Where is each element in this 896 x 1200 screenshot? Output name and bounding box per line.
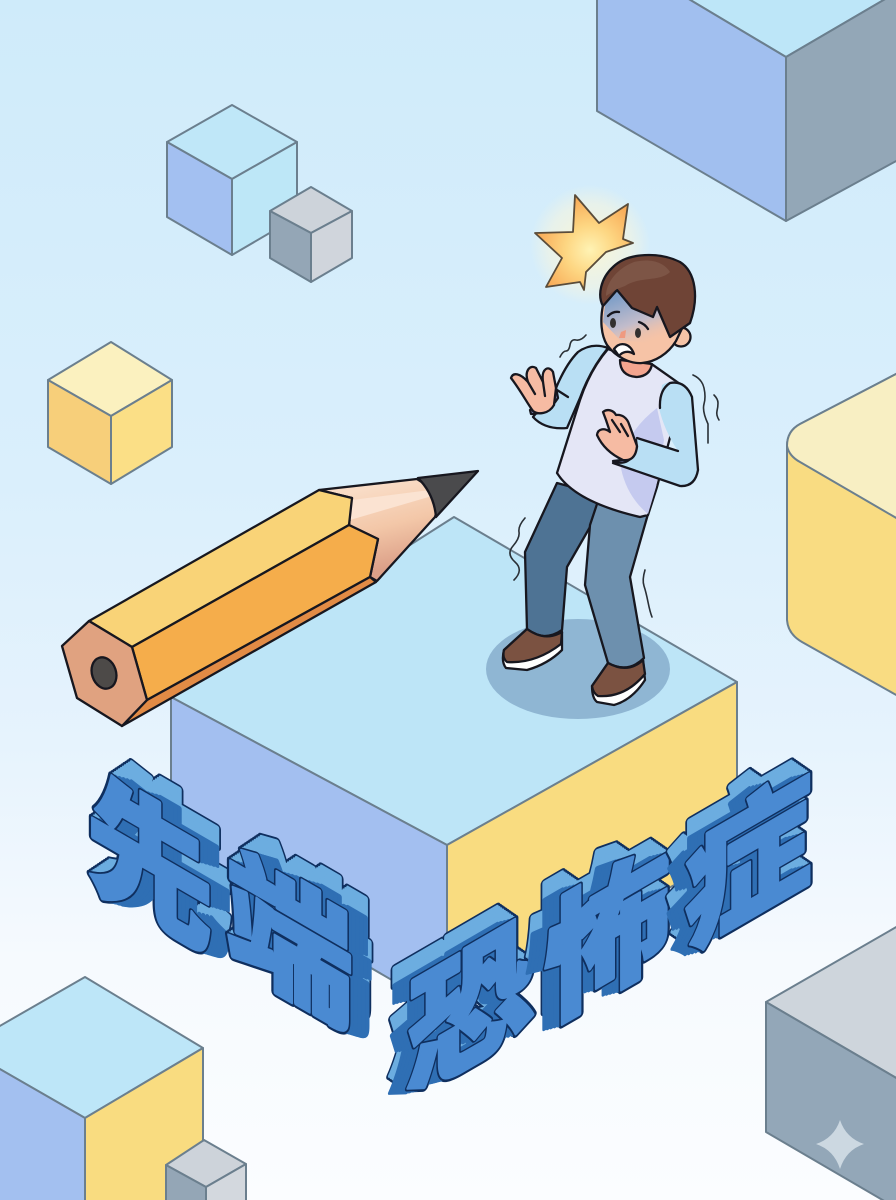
title character 症: 症 xyxy=(684,751,812,978)
title character 症: 症 xyxy=(680,749,808,975)
title character 先: 先 xyxy=(92,749,220,975)
shirt shade xyxy=(620,408,664,514)
cube: grey bottom right xyxy=(766,926,896,1200)
title character 先: 先 xyxy=(86,753,214,980)
title character 先: 先 xyxy=(94,748,222,974)
cube: small grey xyxy=(270,187,352,282)
title character 怖: 怖 xyxy=(537,827,665,1053)
title character 怖: 怖 xyxy=(540,826,668,1052)
title character 症: 症 xyxy=(670,755,798,981)
title character 怖: 怖 xyxy=(535,819,663,1045)
title character 怖: 怖 xyxy=(533,818,661,1044)
tremble lines xyxy=(510,335,719,617)
title character 症: 症 xyxy=(679,748,807,974)
title character 症: 症 xyxy=(675,745,803,971)
title character 先: 先 xyxy=(90,751,218,977)
eyebrows xyxy=(608,312,648,329)
cube: bottom left xyxy=(0,977,203,1200)
face pallor xyxy=(603,285,680,345)
pencil core xyxy=(88,654,120,692)
title character 端: 端 xyxy=(230,827,358,1053)
title character 怖: 怖 xyxy=(535,819,663,1045)
title character 症: 症 xyxy=(670,741,798,968)
title character 端: 端 xyxy=(234,832,362,1058)
pencil top face xyxy=(89,490,352,647)
title character 先: 先 xyxy=(88,752,216,978)
title character 症: 症 xyxy=(684,751,812,978)
title character 怖: 怖 xyxy=(540,823,668,1049)
title character 症: 症 xyxy=(668,740,796,966)
title character 恐: 恐 xyxy=(395,900,523,1126)
title character 恐: 恐 xyxy=(392,887,520,1114)
pencil wood cone xyxy=(319,479,442,581)
left cuff xyxy=(530,388,558,414)
title character 怖: 怖 xyxy=(544,825,672,1052)
title character 恐: 恐 xyxy=(402,895,530,1121)
title character 恐: 恐 xyxy=(395,890,523,1116)
title character 恐: 恐 xyxy=(399,899,527,1125)
hair xyxy=(600,255,695,337)
left sleeve xyxy=(533,346,608,428)
title character 先: 先 xyxy=(90,751,218,977)
pencil side face xyxy=(132,525,378,700)
cube: large top right xyxy=(597,0,896,221)
title character 先: 先 xyxy=(102,743,230,969)
title character 端: 端 xyxy=(238,833,366,1059)
cube: blue floating xyxy=(167,105,297,255)
title character 症: 症 xyxy=(666,739,794,965)
icon: impact star xyxy=(530,185,650,305)
title character 怖: 怖 xyxy=(533,818,661,1044)
nose xyxy=(619,330,626,338)
pencil lead tip xyxy=(418,471,478,517)
title character 恐: 恐 xyxy=(392,887,520,1114)
title: 先端恐怖症 xyxy=(86,728,812,1134)
title character 端: 端 xyxy=(226,829,354,1056)
title character 恐: 恐 xyxy=(392,901,520,1127)
title character 症: 症 xyxy=(677,746,805,973)
pencil end xyxy=(62,621,147,726)
title character 端: 端 xyxy=(230,827,358,1053)
cube: small grey bottom left xyxy=(166,1140,246,1200)
title character 端: 端 xyxy=(242,834,370,1060)
title character 症: 症 xyxy=(682,750,810,976)
title character 怖: 怖 xyxy=(530,815,658,1042)
title character 症: 症 xyxy=(668,740,796,966)
title character 端: 端 xyxy=(244,817,372,1043)
title character 先: 先 xyxy=(88,752,216,978)
title character 怖: 怖 xyxy=(540,823,668,1049)
title character 端: 端 xyxy=(242,819,370,1045)
title character 先: 先 xyxy=(96,747,224,973)
title character 恐: 恐 xyxy=(397,891,525,1117)
title character 怖: 怖 xyxy=(530,829,658,1055)
pencil wood highlight xyxy=(350,490,432,520)
title character 先: 先 xyxy=(98,757,226,983)
title character 怖: 怖 xyxy=(533,828,661,1054)
neck xyxy=(620,360,652,377)
title character 端: 端 xyxy=(232,825,360,1051)
title character 端: 端 xyxy=(228,828,356,1054)
title character 症: 症 xyxy=(673,744,801,970)
title character 先: 先 xyxy=(102,743,230,969)
title character 怖: 怖 xyxy=(539,822,667,1048)
title character 恐: 恐 xyxy=(388,885,516,1111)
title character 怖: 怖 xyxy=(528,814,656,1040)
title character 怖: 怖 xyxy=(526,813,654,1039)
title character 症: 症 xyxy=(677,746,805,973)
title character 恐: 恐 xyxy=(404,896,532,1122)
title character 端: 端 xyxy=(240,820,368,1046)
title character 先: 先 xyxy=(94,756,222,982)
title character 端: 端 xyxy=(242,819,370,1045)
title character 端: 端 xyxy=(234,824,362,1050)
title character 症: 症 xyxy=(673,754,801,980)
title character 症: 症 xyxy=(670,741,798,968)
right shoe xyxy=(592,660,645,705)
title character 先: 先 xyxy=(100,744,228,970)
title character 端: 端 xyxy=(236,823,364,1049)
title character 症: 症 xyxy=(666,756,794,982)
right hand xyxy=(597,410,637,460)
title character 端: 端 xyxy=(226,829,354,1056)
mouth xyxy=(614,344,634,356)
cube: rounded yellow right xyxy=(787,373,896,696)
right cuff xyxy=(613,440,637,463)
title character 端: 端 xyxy=(228,828,356,1054)
title character 恐: 恐 xyxy=(393,889,521,1115)
title character 恐: 恐 xyxy=(395,890,523,1116)
title character 端: 端 xyxy=(238,821,366,1047)
title character 恐: 恐 xyxy=(388,885,516,1111)
pencil xyxy=(62,471,478,726)
title character 症: 症 xyxy=(666,739,794,965)
title character 端: 端 xyxy=(246,816,374,1042)
title character 恐: 恐 xyxy=(388,902,516,1128)
title character 端: 端 xyxy=(232,825,360,1051)
title character 先: 先 xyxy=(92,749,220,975)
title character 端: 端 xyxy=(234,824,362,1050)
title character 恐: 恐 xyxy=(390,886,518,1112)
title character 怖: 怖 xyxy=(544,825,672,1052)
front leg xyxy=(585,495,648,667)
title character 先: 先 xyxy=(96,747,224,973)
title character 恐: 恐 xyxy=(406,897,534,1124)
back leg xyxy=(525,483,620,636)
title character 先: 先 xyxy=(90,754,218,981)
eyes xyxy=(610,318,641,338)
icon: sparkle watermark xyxy=(816,1120,864,1169)
title character 先: 先 xyxy=(102,758,230,984)
title character 先: 先 xyxy=(98,745,226,971)
title character 恐: 恐 xyxy=(404,896,532,1122)
title character 怖: 怖 xyxy=(537,820,665,1047)
title character 症: 症 xyxy=(671,743,799,969)
sleeve fold xyxy=(557,390,568,397)
title character 恐: 恐 xyxy=(399,892,527,1119)
title character 恐: 恐 xyxy=(390,886,518,1112)
title character 恐: 恐 xyxy=(401,894,529,1120)
title character 端: 端 xyxy=(238,821,366,1047)
title character 恐: 恐 xyxy=(401,894,529,1120)
title character 恐: 恐 xyxy=(402,895,530,1121)
title character 怖: 怖 xyxy=(526,813,654,1039)
title character 恐: 恐 xyxy=(402,898,530,1124)
pencil lower face xyxy=(122,577,376,726)
title character 怖: 怖 xyxy=(531,817,659,1043)
title character 怖: 怖 xyxy=(539,822,667,1048)
left hand xyxy=(511,367,556,413)
person xyxy=(503,255,719,705)
title character 端: 端 xyxy=(226,829,354,1056)
title character 怖: 怖 xyxy=(528,814,656,1040)
title character 端: 端 xyxy=(244,817,372,1043)
ear xyxy=(672,328,690,346)
title character 先: 先 xyxy=(94,748,222,974)
title character 症: 症 xyxy=(673,744,801,970)
title character 恐: 恐 xyxy=(406,897,534,1124)
title character 先: 先 xyxy=(98,745,226,971)
title character 恐: 恐 xyxy=(399,892,527,1119)
title character 症: 症 xyxy=(677,753,805,979)
title character 怖: 怖 xyxy=(544,825,672,1052)
title character 症: 症 xyxy=(684,751,812,978)
title character 先: 先 xyxy=(104,741,232,967)
person's shadow xyxy=(486,619,670,719)
right sleeve xyxy=(613,381,698,486)
shirt xyxy=(557,349,680,517)
title character 恐: 恐 xyxy=(406,897,534,1124)
title character 症: 症 xyxy=(680,749,808,975)
title character 端: 端 xyxy=(236,823,364,1049)
cube: yellow left xyxy=(48,342,172,484)
title character 端: 端 xyxy=(246,816,374,1042)
title character 恐: 恐 xyxy=(393,889,521,1115)
title character 恐: 恐 xyxy=(397,891,525,1117)
title character 怖: 怖 xyxy=(531,817,659,1043)
title character 端: 端 xyxy=(246,835,374,1061)
title character 怖: 怖 xyxy=(542,824,670,1050)
title character 先: 先 xyxy=(86,753,214,980)
title character 症: 症 xyxy=(680,752,808,978)
face xyxy=(601,285,686,363)
title character 先: 先 xyxy=(106,740,234,966)
title character 症: 症 xyxy=(682,750,810,976)
title character 怖: 怖 xyxy=(542,824,670,1050)
title character 先: 先 xyxy=(106,740,234,966)
title character 先: 先 xyxy=(100,744,228,970)
left shoe xyxy=(503,629,562,670)
title character 怖: 怖 xyxy=(537,820,665,1047)
title character 端: 端 xyxy=(240,820,368,1046)
main platform cube xyxy=(171,517,737,1012)
title character 先: 先 xyxy=(106,759,234,985)
title character 先: 先 xyxy=(104,741,232,967)
title character 怖: 怖 xyxy=(526,830,654,1056)
title character 症: 症 xyxy=(671,743,799,969)
title character 怖: 怖 xyxy=(530,815,658,1042)
title character 症: 症 xyxy=(675,745,803,971)
title character 症: 症 xyxy=(679,748,807,974)
title character 端: 端 xyxy=(230,830,358,1057)
title character 先: 先 xyxy=(86,753,214,980)
